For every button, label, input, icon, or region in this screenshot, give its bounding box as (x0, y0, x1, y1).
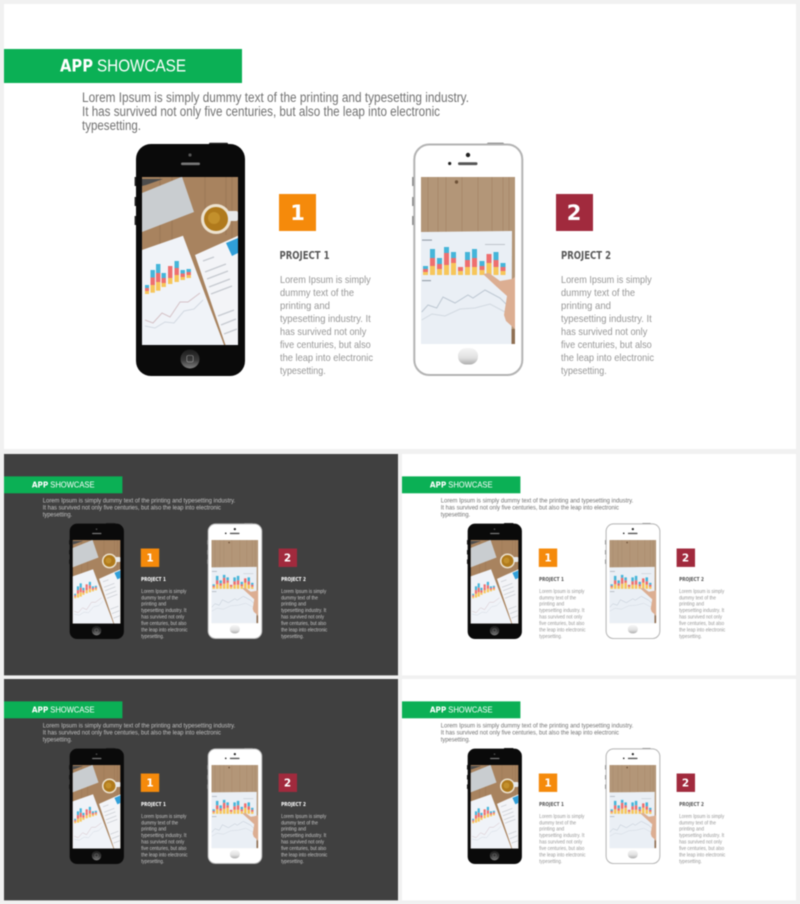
badge 1: 1 (290, 201, 305, 225)
project 1 text: dummy text of the (539, 820, 576, 826)
title banner: APP (430, 480, 446, 490)
intro text: Lorem Ipsum is simply dummy text of the printing and typesetting industry. (441, 723, 633, 730)
panel: dark slide, top left (4, 454, 398, 675)
icon: black phone (69, 748, 124, 864)
icon: white phone (207, 748, 262, 864)
title banner: SHOWCASE (448, 480, 493, 490)
project 1 heading: PROJECT 1 (539, 577, 564, 583)
icon: black phone (467, 748, 522, 864)
title banner (4, 476, 122, 493)
project 1 text: the leap into electronic (280, 352, 373, 364)
project 1 text: has survived not only (539, 840, 583, 846)
project 1 text: five centuries, but also (141, 846, 186, 852)
project 2 text: dummy text of the (281, 595, 318, 601)
project 2 text: dummy text of the (679, 595, 716, 601)
project 2 text: dummy text of the (561, 287, 635, 299)
project 2 text: has survived not only (679, 840, 722, 846)
project 2 text: Lorem Ipsum is simply (281, 589, 327, 595)
project 2 text: five centuries, but also (561, 339, 652, 351)
project 2 text: printing and (561, 300, 611, 312)
project 2 text: the leap into electronic (679, 628, 726, 634)
icon: white phone (605, 748, 660, 864)
project 2 text: dummy text of the (281, 820, 318, 826)
title banner: SHOWCASE (50, 480, 95, 490)
project 1 text: dummy text of the (539, 595, 576, 601)
badge 2 (677, 549, 695, 567)
icon: white phone (207, 523, 262, 639)
project 1 text (539, 814, 586, 865)
project 1 text: printing and (280, 300, 330, 312)
project 1 text: typesetting. (539, 634, 562, 640)
project 2 text: typesetting industry. It (679, 833, 725, 839)
title banner (402, 476, 520, 493)
project 2 text (281, 589, 328, 640)
project 1 text: has survived not only (141, 615, 185, 621)
title banner (402, 701, 520, 718)
intro text: typesetting. (43, 512, 72, 519)
icon: black phone (69, 523, 124, 639)
badge 2 (677, 774, 695, 792)
project 2 text: Lorem Ipsum is simply (679, 589, 725, 595)
intro text: It has survived not only five centuries, but also the leap into electronic (441, 730, 619, 737)
project 2 text: typesetting industry. It (561, 313, 652, 325)
badge 1 (539, 549, 557, 567)
intro text: typesetting. (82, 118, 141, 133)
project 1 text: typesetting. (280, 365, 326, 377)
project 2 text: typesetting. (281, 634, 304, 640)
project 1 text: has survived not only (280, 326, 367, 338)
project 2 text: typesetting industry. It (679, 608, 725, 614)
title banner: SHOWCASE (448, 705, 493, 715)
intro text: It has survived not only five centuries, but also the leap into electronic (82, 104, 440, 119)
intro text: Lorem Ipsum is simply dummy text of the printing and typesetting industry. (441, 498, 633, 505)
project 2 text: Lorem Ipsum is simply (281, 814, 327, 820)
project 2 heading: PROJECT 2 (561, 249, 611, 262)
title banner: APP (32, 705, 48, 715)
project 1 text: printing and (141, 827, 166, 833)
badge 1 (279, 194, 316, 231)
intro text: typesetting. (43, 737, 72, 744)
icon: white phone (605, 523, 660, 639)
badge 2: 2 (284, 552, 291, 564)
project 2 heading: PROJECT 2 (281, 577, 306, 583)
project 1 text: has survived not only (539, 615, 583, 621)
project 2 text: has survived not only (281, 615, 324, 621)
badge 1 (141, 549, 159, 567)
title banner: APP (32, 480, 48, 490)
project 1 text: typesetting industry. It (539, 608, 585, 614)
intro text (82, 90, 469, 133)
project 1 heading: PROJECT 1 (280, 249, 330, 262)
intro text: Lorem Ipsum is simply dummy text of the printing and typesetting industry. (43, 498, 235, 505)
badge 2 (279, 774, 297, 792)
intro text (43, 723, 235, 744)
project 1 text: typesetting. (141, 859, 164, 865)
title banner: SHOWCASE (97, 56, 186, 76)
badge 2: 2 (567, 201, 581, 225)
badge 1: 1 (146, 552, 154, 564)
project 2 text: five centuries, but also (679, 621, 724, 627)
project 1 text (141, 814, 188, 865)
badge 2 (556, 194, 593, 231)
title banner: APP (60, 57, 93, 76)
project 1 text: Lorem Ipsum is simply (141, 814, 187, 820)
project 2 text: typesetting industry. It (281, 833, 327, 839)
project 2 text: the leap into electronic (281, 853, 328, 859)
project 1 text (539, 589, 586, 640)
project 1 text: Lorem Ipsum is simply (539, 814, 585, 820)
project 1 text: printing and (539, 827, 564, 833)
project 2 text: five centuries, but also (679, 846, 724, 852)
badge 2: 2 (682, 552, 689, 564)
project 2 text: Lorem Ipsum is simply (561, 274, 652, 286)
badge 1 (141, 774, 159, 792)
panel: white slide, bottom right (402, 679, 796, 900)
project 1 heading: PROJECT 1 (539, 802, 564, 808)
project 1 text: typesetting. (141, 634, 164, 640)
badge 2 (279, 549, 297, 567)
project 2 text: printing and (281, 602, 306, 608)
project 1 text: dummy text of the (280, 287, 354, 299)
badge 2: 2 (284, 777, 291, 789)
badge 2: 2 (682, 777, 689, 789)
project 2 text: Lorem Ipsum is simply (679, 814, 725, 820)
project 2 text: has survived not only (281, 840, 324, 846)
project 1 text: Lorem Ipsum is simply (141, 589, 187, 595)
intro text: Lorem Ipsum is simply dummy text of the printing and typesetting industry. (43, 723, 235, 730)
project 1 text: dummy text of the (141, 595, 178, 601)
project 2 text (679, 589, 726, 640)
intro text: typesetting. (441, 512, 470, 519)
project 2 text: printing and (281, 827, 306, 833)
project 2 text: printing and (679, 827, 704, 833)
project 1 text: has survived not only (141, 840, 185, 846)
badge 1 (539, 774, 557, 792)
title banner: SHOWCASE (50, 705, 95, 715)
project 2 text: has survived not only (561, 326, 648, 338)
project 2 heading: PROJECT 2 (679, 577, 704, 583)
project 2 text: the leap into electronic (281, 628, 328, 634)
project 1 text: Lorem Ipsum is simply (539, 589, 585, 595)
project 2 heading: PROJECT 2 (281, 802, 306, 808)
project 1 text: five centuries, but also (280, 339, 371, 351)
project 2 text (281, 814, 328, 865)
project 2 text: typesetting. (679, 859, 702, 865)
title banner (4, 701, 122, 718)
project 1 text: printing and (539, 602, 564, 608)
project 1 text: typesetting. (539, 859, 562, 865)
intro text: typesetting. (441, 737, 470, 744)
project 1 text: printing and (141, 602, 166, 608)
badge 1: 1 (146, 777, 154, 789)
project 1 text: typesetting industry. It (539, 833, 585, 839)
intro text: Lorem Ipsum is simply dummy text of the printing and typesetting industry. (82, 90, 469, 105)
project 1 heading: PROJECT 1 (141, 802, 166, 808)
title banner (4, 49, 242, 83)
project 2 text (561, 274, 654, 377)
project 1 text (280, 274, 373, 377)
intro text: It has survived not only five centuries, but also the leap into electronic (43, 505, 221, 512)
project 1 text: the leap into electronic (141, 853, 188, 859)
project 1 text: five centuries, but also (141, 621, 186, 627)
project 1 heading: PROJECT 1 (141, 577, 166, 583)
project 2 text: typesetting. (679, 634, 702, 640)
project 2 text: the leap into electronic (679, 853, 726, 859)
icon: black phone (135, 143, 245, 376)
intro text: It has survived not only five centuries, but also the leap into electronic (441, 505, 619, 512)
panel: dark slide, bottom left (4, 679, 398, 900)
project 2 text: five centuries, but also (281, 621, 326, 627)
project 2 text: typesetting. (281, 859, 304, 865)
project 2 text: has survived not only (679, 615, 722, 621)
badge 1: 1 (544, 777, 552, 789)
project 1 text (141, 589, 188, 640)
icon: black phone (467, 523, 522, 639)
icon: white phone (412, 143, 522, 375)
intro text: It has survived not only five centuries, but also the leap into electronic (43, 730, 221, 737)
panel: white slide, top right (402, 454, 796, 675)
title banner: APP (430, 705, 446, 715)
project 1 text: dummy text of the (141, 820, 178, 826)
project 1 text: the leap into electronic (539, 853, 586, 859)
project 1 text: typesetting industry. It (141, 608, 187, 614)
project 2 heading: PROJECT 2 (679, 802, 704, 808)
project 2 text: typesetting. (561, 365, 607, 377)
project 1 text: typesetting industry. It (280, 313, 371, 325)
project 1 text: the leap into electronic (539, 628, 586, 634)
intro text (43, 498, 235, 519)
project 1 text: typesetting industry. It (141, 833, 187, 839)
project 2 text: printing and (679, 602, 704, 608)
project 2 text: typesetting industry. It (281, 608, 327, 614)
project 1 text: the leap into electronic (141, 628, 188, 634)
project 2 text (679, 814, 726, 865)
intro text (441, 723, 633, 744)
project 1 text: five centuries, but also (539, 846, 584, 852)
project 2 text: dummy text of the (679, 820, 716, 826)
badge 1: 1 (544, 552, 552, 564)
intro text (441, 498, 633, 519)
project 2 text: five centuries, but also (281, 846, 326, 852)
project 1 text: five centuries, but also (539, 621, 584, 627)
project 2 text: the leap into electronic (561, 352, 654, 364)
panel: large white slide (4, 4, 796, 449)
project 1 text: Lorem Ipsum is simply (280, 274, 371, 286)
